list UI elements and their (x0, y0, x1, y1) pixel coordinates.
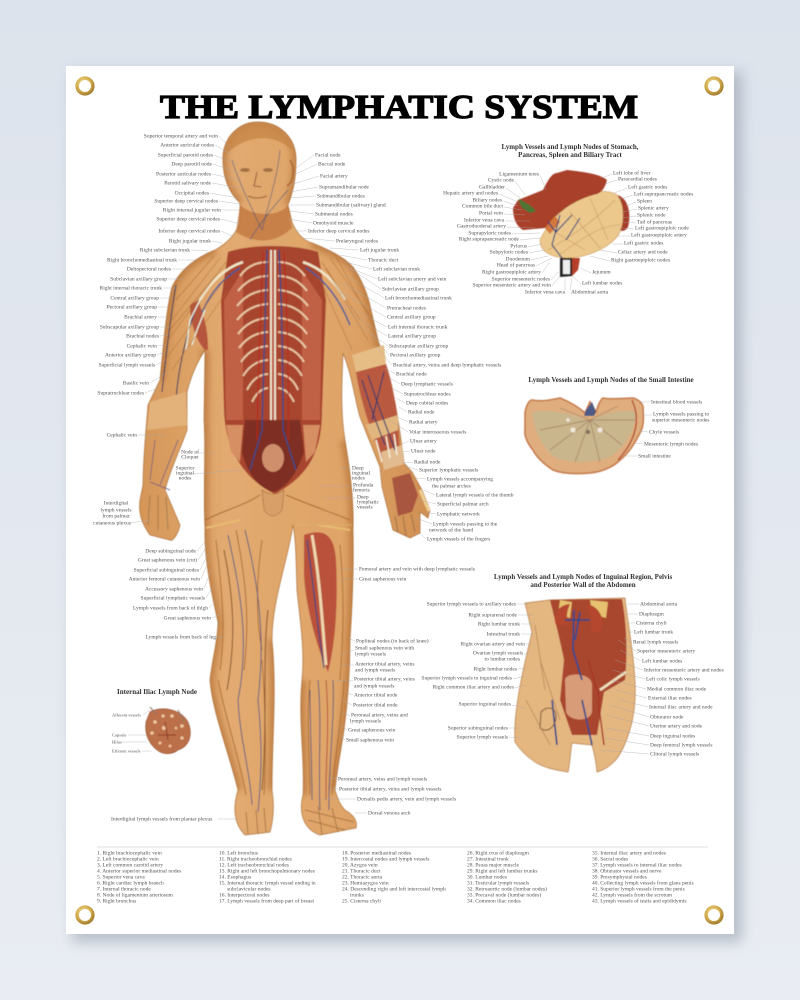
right labels: head to forearm: Brachial node (396, 372, 427, 378)
right labels: groin and lower limb (111, 466, 475, 823)
body silhouette (140, 122, 430, 835)
labels: stomach inset: Pylorus (510, 244, 527, 250)
left labels: forearm, hand and thigh: Superficial subinguinal nodes (134, 567, 199, 574)
right labels: head to forearm: Volar interosseous vessels (409, 430, 466, 436)
right labels: groin and lower limb: Small saphenous vein (346, 738, 394, 744)
illustration: lymph node (146, 707, 190, 754)
labels: stomach inset: Tail of pancreas (637, 219, 672, 226)
legend column 1: 2. Left brachiocephalic vein (97, 856, 159, 863)
right labels: head to forearm: Superior lymphatic vessels (419, 468, 478, 474)
legend column 1: 7. Internal thoracic node (97, 887, 151, 893)
labels: pelvis inset: Superior mesenteric artery (637, 649, 696, 655)
labels: pelvis inset: Right lumbar trunk (478, 622, 520, 628)
labels: stomach inset: Left gastroepiploic node (635, 225, 689, 232)
left labels: forearm, hand and thigh: Cloquet (181, 455, 199, 461)
legend column 5: 42. Lymph vessels from the scrotum (592, 892, 673, 899)
left labels: forearm, hand and thigh: Superficial lymphatic vessels (141, 595, 205, 602)
heading: lymph node inset: Internal Iliac Lymph Node (117, 688, 197, 696)
right labels: groin and lower limb: vessels (357, 505, 373, 511)
right labels: groin and lower limb: Great saphenous vein (348, 728, 396, 734)
left labels: head to arm: Cephalic vein (127, 344, 157, 350)
left labels: head to arm: Inferior deep cervical nodes (158, 228, 220, 235)
right labels: groin and lower limb: nodes (352, 476, 365, 482)
right labels: head to forearm: Supratrochlear nodes (404, 392, 451, 398)
labels: pelvis inset: Deep femoral lymph vessels (650, 742, 712, 749)
inset: small intestine (525, 376, 709, 474)
right labels: head to forearm: Left subclavian trunk (373, 266, 420, 273)
labels: pelvis inset (421, 602, 724, 758)
left labels: forearm, hand and thigh: Cephalic vein (107, 433, 137, 439)
right labels: head to forearm: Omohyoid muscle (313, 221, 354, 227)
legend column 2: subclavicular nodes (227, 887, 271, 893)
left labels: head to arm: Right internal jugular vein (163, 208, 221, 214)
left labels: head to arm: Occipital nodes (175, 191, 209, 197)
left labels: forearm, hand and thigh: Great saphenous vein (164, 616, 211, 622)
labels: stomach inset: Left suprapancreatic nodes (634, 191, 693, 198)
labels: small intestine inset: Chyle vessels (649, 430, 679, 436)
right labels: head to forearm: Prelaryngeal nodes (336, 239, 378, 245)
left labels: forearm, hand and thigh: Interdigital (104, 501, 129, 507)
labels: pelvis inset: Abdominal aorta (640, 602, 678, 608)
poster shadow (72, 72, 742, 942)
labels: pelvis inset: Superior lymph vessels to inguinal nodes (421, 676, 512, 682)
labels: stomach inset: Common bile duct (462, 204, 503, 210)
right labels: groin and lower limb: Deep (357, 495, 369, 501)
right labels: groin and lower limb: Peroneal artery, veins and (351, 713, 408, 719)
labels: pelvis inset: Right lumbar nodes (474, 667, 517, 673)
right labels: groin and lower limb: Dorsal venous arch (368, 811, 411, 817)
legend column 3: 25. Cisterna chyli (342, 899, 381, 905)
right labels: groin and lower limb: Posterior tibial node (353, 703, 398, 709)
left labels: head to arm: Basilic vein (123, 381, 149, 387)
labels: pelvis inset: Ovarian lymph vessels (473, 651, 523, 657)
labels: pelvis inset: Cisterna chyli (636, 621, 667, 627)
right labels: groin and lower limb: femoris (353, 487, 370, 494)
labels: stomach inset: Hepatic artery and nodes (443, 191, 498, 197)
legend column 4: 34. Common iliac nodes (467, 899, 521, 905)
legend column 4: 29. Right and left lumbar trunks (467, 868, 538, 875)
labels: stomach inset: Right suprapancreatic node (459, 237, 520, 243)
labels: stomach inset: Spleen (637, 199, 652, 205)
labels: stomach inset: Splenic node (637, 213, 666, 219)
labels: stomach inset: Inferior vena cava (464, 217, 505, 224)
numbered legend (97, 850, 694, 905)
right labels: groin and lower limb: lymph vessels (350, 719, 381, 725)
labels: small intestine inset: superior mesenteric nodes (652, 418, 709, 424)
left labels: head to arm: Posterior auricular nodes (156, 172, 211, 178)
labels: pelvis inset: Superior subinguinal nodes (448, 726, 508, 732)
left labels: forearm, hand and thigh: Deep subinguinal node (145, 549, 197, 555)
labels: stomach inset (443, 170, 693, 296)
labels: pelvis inset: Superior inguinal nodes (458, 702, 511, 708)
labels: pelvis inset: Renal lymph vessels (633, 640, 678, 646)
labels: pelvis inset: Left lumbar nodes (642, 658, 682, 665)
legend column 2: 11. Right tracheobronchial nodes (219, 857, 292, 863)
right labels: groin and lower limb: and lymph vessels (354, 684, 394, 690)
right labels: head to forearm: Left subclavian artery and vein (378, 276, 447, 283)
right labels: groin and lower limb: Posterior tibial artery, veins (354, 677, 415, 683)
right labels: groin and lower limb: Anterior tibial artery, veins (355, 662, 415, 668)
legend column 2: 16. Interpectoral nodes (219, 893, 270, 899)
left labels: forearm, hand and thigh: nodes (179, 476, 191, 482)
right labels: head to forearm: Left internal thoracic trunk (388, 324, 448, 331)
heading: pelvis inset: and Posterior Wall of the Abdomen (530, 581, 636, 589)
labels: pelvis inset: Right suprarenal node (468, 613, 518, 619)
leader lines: pelvis inset (509, 604, 649, 754)
left labels: forearm, hand and thigh: from palmar (102, 513, 130, 520)
labels: pelvis inset: Clitoral lymph vessels (650, 752, 699, 758)
right labels: head to forearm: Lateral axillary group (388, 334, 436, 340)
right labels: groin and lower limb: Peroneal artery, veins and lymph vessels (338, 777, 427, 783)
legend column 3: 21. Thoracic duct (342, 869, 381, 875)
labels: stomach inset: Inferior vena cava (525, 289, 566, 296)
left labels: forearm, hand and thigh: Lymph vessels from back of thigh (133, 605, 208, 612)
right labels: groin and lower limb: Profunda (353, 482, 374, 489)
labels: pelvis inset: Inferior mesenteric artery and nodes (644, 667, 724, 674)
legend column 3: 20. Azygos vein (342, 863, 378, 869)
left labels: forearm, hand and thigh (93, 433, 216, 641)
labels: stomach inset: Celiac artery and node (618, 250, 668, 256)
labels: pelvis inset: Obturator node (650, 715, 684, 721)
left labels: head to arm: Superior deep cervical nodes (156, 217, 220, 223)
leg dissection: viewer right thigh (296, 525, 352, 672)
left labels: forearm, hand and thigh: Anterior femoral cutaneous vein (129, 576, 200, 583)
labels: lymph node inset: Afferent vessels (112, 712, 141, 717)
left labels: head to arm: Superior deep cervical nodes (154, 199, 218, 205)
left labels: head to arm: Supratrochlear nodes (97, 391, 144, 397)
right labels: head to forearm: Subclavian axillary group (382, 287, 439, 293)
labels: stomach inset: Splenic artery (638, 206, 669, 212)
illustration: stomach and liver (513, 170, 629, 277)
left labels: head to arm: Superficial parotid nodes (158, 152, 213, 159)
labels: pelvis inset: Internal iliac artery and node (649, 705, 713, 711)
right labels: head to forearm: the palmar arches (432, 484, 471, 490)
labels: small intestine inset: Mesenteric lymph nodes (644, 442, 698, 448)
right labels: head to forearm (308, 153, 514, 543)
left labels: forearm, hand and thigh: inguinal (176, 471, 194, 477)
right labels: groin and lower limb: lymphatic (357, 500, 380, 506)
right labels: head to forearm: Deep cubital nodes (406, 401, 448, 407)
legend column 2: 12. Left tracheobronchial nodes (219, 862, 289, 869)
left labels: head to arm: Right bronchomediastinal trunk (107, 258, 177, 264)
legend column 4: 32. Retroaortic node (lumbar nodes) (467, 886, 547, 893)
legend column 2 (219, 850, 316, 905)
legend column 2: 10. Left bronchus (219, 850, 258, 857)
legend column 1: 3. Left common carotid artery (97, 862, 163, 869)
head shading and face (225, 124, 293, 241)
heading: stomach inset (501, 143, 639, 159)
legend column 1: 8. Node of ligamentum arteriosum (97, 892, 174, 899)
right labels: head to forearm: Superficial palmar arch (437, 501, 489, 508)
legend column 4: 33. Precaval node (lumbar nodes) (467, 892, 541, 899)
leader lines: stomach inset (499, 174, 637, 290)
left labels: head to arm (97, 134, 221, 397)
labels: small intestine inset: Lymph vessels passing to (653, 412, 709, 418)
inset: inguinal region, pelvis and posterior abdominal wall (421, 573, 724, 772)
legend column 4: 31. Testicular lymph vessels (467, 881, 529, 887)
legend column 3: 23. Hemiazygos vein (342, 881, 389, 887)
heading: stomach inset: Pancreas, Spleen and Biliary Tract (518, 151, 622, 159)
spine and vessels (196, 250, 350, 470)
labels: stomach inset: Gallbladder (479, 185, 505, 191)
right labels: groin and lower limb: Posterior tibial artery, veins and lymph vessels (339, 787, 441, 793)
labels: stomach inset: Left lobe of liver (613, 170, 651, 177)
left labels: forearm, hand and thigh: Great saphenous vein (cut) (138, 557, 197, 564)
legend column 4: 28. Psoas major muscle (467, 863, 519, 869)
labels: stomach inset: Ligamentum teres (499, 172, 539, 178)
left labels: head to arm: Right jugular trunk (169, 239, 211, 245)
labels: pelvis inset: Medial common iliac node (647, 687, 707, 693)
labels: stomach inset: Cystic node (488, 178, 515, 184)
left labels: head to arm: Brachial nodes (126, 334, 159, 340)
right labels: groin and lower limb: Deep (352, 466, 364, 472)
legend column 3: 18. Posterior mediastinal nodes (342, 851, 411, 857)
right labels: head to forearm: network of the hand (429, 527, 473, 534)
left labels: head to arm: Deep parotid node (171, 162, 213, 168)
legend column 5: 38. Obturator vessels and nerve (592, 869, 662, 875)
legend column 5: 43. Lymph vessels of testis and epididymis (592, 898, 687, 905)
labels: pelvis inset: Superior lymph vessels to axillary nodes (427, 602, 516, 608)
leg muscle strokes and vessels (216, 530, 354, 834)
legend column 5: 37. Lymph vessels to internal iliac nodes (592, 863, 682, 869)
right labels: head to forearm: Left bronchomediastinal trunk (385, 295, 452, 302)
right labels: head to forearm: Left jugular trunk (360, 247, 399, 254)
ribs (237, 262, 308, 402)
labels: pelvis inset: Right ovarian artery and vein (461, 642, 525, 648)
right labels: head to forearm: Lymph vessels passing to the (433, 522, 498, 528)
labels: pelvis inset: Right common iliac artery and nodes (433, 685, 514, 691)
left labels: forearm, hand and thigh: Accessory saphenous vein (145, 587, 203, 593)
labels: pelvis inset: Deep inguinal nodes (650, 734, 695, 740)
inset: stomach, pancreas, spleen and biliary tract (443, 143, 693, 296)
right labels: groin and lower limb: Interdigital lymph vessels from plantar plexus (111, 816, 212, 823)
legend column 1 (97, 851, 181, 905)
right labels: groin and lower limb: Popliteal nodes (in back of knee) (356, 638, 429, 645)
labels: pelvis inset: Left colic lymph vessels (646, 676, 700, 683)
legend column 5: 40. Collecting lymph vessels from glans penis (592, 880, 694, 887)
labels: small intestine inset: Intestinal blood vessels (651, 400, 702, 406)
right labels: head to forearm: Facial artery (320, 174, 348, 180)
right labels: head to forearm: Deep lymphatic vessels (401, 382, 453, 388)
legend column 5: 41. Superior lymph vessels from the penis (592, 886, 685, 893)
legend column 3: trunks (350, 893, 364, 899)
right labels: head to forearm: Lymph vessels of the fingers (427, 536, 490, 543)
labels: stomach inset: Abdominal aorta (571, 290, 609, 296)
legend column 2: 13. Right and left bronchopulmonary nodes (219, 868, 315, 875)
left labels: head to arm: Anterior axillary group (105, 353, 156, 359)
right labels: groin and lower limb: lymph vessels (355, 652, 386, 658)
left labels: head to arm: Subscapular axillary group (100, 325, 159, 331)
right labels: head to forearm: Central axillary group (387, 315, 436, 321)
labels: small intestine inset: Small intestine (638, 454, 671, 460)
right labels: head to forearm: Subscapular axillary group (389, 344, 449, 350)
right labels: head to forearm: Pretracheal nodes (387, 306, 426, 312)
left labels: head to arm: Pectoral axillary group (107, 305, 157, 311)
left labels: head to arm: Superficial lymph vessels (98, 362, 155, 369)
labels: stomach inset: Paracardial nodes (618, 177, 657, 183)
legend column 4: 27. Intestinal trunk (467, 857, 509, 863)
labels: stomach inset: Duodenum (506, 257, 531, 263)
legend column 4 (467, 850, 547, 905)
labels: stomach inset: Superior mesenteric artery and vein (472, 283, 551, 289)
heading: small intestine inset: Lymph Vessels and Lymph Nodes of the Small Intestine (528, 376, 694, 384)
right labels: head to forearm: Facial node (315, 153, 341, 159)
right labels: groin and lower limb: Small saphenous vein with (355, 646, 414, 652)
left labels: forearm, hand and thigh: cutaneous plexus (93, 521, 131, 527)
right labels: head to forearm: Lymph vessels accompanying (427, 477, 493, 483)
legend column 5: 36. Sacral nodes (592, 857, 628, 863)
heading: pelvis inset (494, 573, 672, 589)
leader lines: main figure (130, 136, 436, 819)
labels: stomach inset: Gastroduodenal artery (457, 224, 506, 230)
illustration: intestine fan (525, 398, 643, 474)
labels: stomach inset: Subpyloric nodes (490, 250, 528, 256)
arm dissection: viewer right (352, 345, 429, 536)
labels: stomach inset: Left lumbar nodes (582, 280, 622, 287)
labels: pelvis inset: External iliac nodes (648, 696, 692, 702)
labels: pelvis inset: Intestinal trunk (487, 632, 520, 638)
left labels: head to arm: Central axillary group (110, 296, 159, 302)
legend column 5: 35. Internal iliac artery and nodes (592, 851, 666, 857)
left labels: head to arm: Right subclavian trunk (140, 248, 190, 254)
legend column 4: 30. Lumbar nodes (467, 875, 507, 881)
poster sheet (66, 66, 734, 934)
left labels: forearm, hand and thigh: Node of (181, 449, 199, 456)
legend column 1: 5. Superior vena cava (97, 875, 145, 881)
right labels: groin and lower limb: Femoral artery and vein with deep lymphatic vessels (359, 567, 475, 573)
legend column 4: 26. Right crus of diaphragm (467, 850, 530, 857)
grommets (77, 78, 722, 923)
arm dissection: viewer left (147, 285, 208, 530)
left labels: head to arm: Superior temporal artery and vein (144, 134, 218, 140)
legend column 5: 39. Presymphysial nodes (592, 875, 647, 881)
labels: pelvis inset: Left lumbar trunk (634, 629, 673, 636)
legend column 1: 6. Right cardiac lymph branch (97, 881, 164, 887)
right labels: head to forearm: Submental nodes (315, 212, 353, 218)
right labels: head to forearm: Radial artery (409, 420, 438, 426)
legend column 3: 24. Descending right and left intercostal lymph (342, 886, 446, 893)
labels: stomach inset: Biliary nodes (473, 198, 502, 204)
legend column 5 (592, 851, 694, 905)
groin (205, 490, 350, 530)
right labels: groin and lower limb: Dorsalis pedis artery, vein and lymph vessels (357, 797, 456, 803)
legend column 3 (342, 851, 446, 905)
left labels: forearm, hand and thigh: Superior (176, 466, 195, 472)
right labels: head to forearm: Radial node (414, 460, 441, 466)
labels: stomach inset: Suprapyloric nodes (468, 231, 511, 237)
labels: pelvis inset: to lumbar nodes (485, 657, 520, 663)
right labels: head to forearm: Lateral lymph vessels of the thumb (436, 492, 514, 499)
labels: pelvis inset: Superior lymph vessels (457, 735, 508, 741)
right labels: head to forearm: Ulnar node (411, 449, 436, 455)
labels: lymph node inset: Capsule (112, 732, 127, 737)
right labels: head to forearm: Supramandibular node (319, 185, 370, 191)
right labels: groin and lower limb: Anterior tibial node (354, 693, 398, 699)
left labels: head to arm: Parotid salivary node (164, 181, 212, 187)
leader lines: small intestine inset (626, 402, 652, 456)
inset: internal iliac lymph node (112, 688, 197, 754)
left labels: forearm, hand and thigh: Lymph vessels from back of leg (146, 634, 216, 641)
heading: stomach inset: Lymph Vessels and Lymph Nodes of Stomach, (501, 143, 639, 151)
labels: lymph node inset: Efferent vessels (112, 748, 141, 753)
right labels: groin and lower limb: inguinal (352, 471, 370, 477)
left labels: head to arm: Deltopectoral nodes (127, 267, 171, 273)
legend column 3: 19. Intercostal nodes and lymph vessels (342, 857, 429, 863)
legend column 2: 14. Esophagus (219, 875, 251, 881)
right labels: head to forearm: Brachial artery, veins and deep lymphatic vessels (393, 363, 501, 369)
legend column 1: 4. Anterior superior mediastinal nodes (97, 869, 181, 875)
torso cavity (221, 246, 326, 494)
leader lines: lymph node inset (122, 710, 152, 751)
labels: stomach inset: Head of pancreas (497, 262, 535, 269)
labels: lymph node inset: Hilus (112, 739, 122, 744)
right labels: head to forearm: Ulnar artery (410, 439, 437, 445)
labels: stomach inset: Portal vein (479, 211, 503, 217)
legend column 2: 15. Internal thoracic lymph vessel ending in (219, 881, 316, 887)
labels: stomach inset: Right gastroepiploic artery (482, 270, 541, 276)
labels: pelvis inset: Diaphragm (639, 612, 664, 618)
right labels: head to forearm: Lymphatic network (437, 512, 480, 518)
left labels: head to arm: Right internal thoracic trunk (100, 286, 162, 292)
legend column 3: 22. Thoracic aorta (342, 875, 383, 881)
illustration: pelvis (515, 598, 635, 772)
labels: stomach inset: Left gastroepiploic artery (631, 232, 687, 239)
labels: stomach inset: Right gastroepiploic nodes (611, 258, 670, 264)
right labels: head to forearm: Inferior deep cervical nodes (308, 228, 370, 235)
right labels: head to forearm: Pectoral axillary group (390, 353, 441, 359)
labels: pelvis inset: Uterine artery and node (650, 724, 703, 730)
labels: lymph node inset (112, 712, 141, 753)
legend column 1: 1. Right brachiocephalic vein (97, 851, 162, 857)
right labels: head to forearm: Submandibular nodes (317, 194, 365, 200)
right labels: head to forearm: Buccal node (318, 162, 346, 168)
right labels: head to forearm: Thoracic duct (368, 258, 399, 264)
heading: pelvis inset: Lymph Vessels and Lymph Nodes of Inguinal Region, Pelvis (494, 573, 672, 581)
left labels: head to arm: Subclavian axillary group (110, 277, 167, 283)
body edge shading (160, 122, 395, 795)
right labels: head to forearm: Radial node (408, 410, 435, 416)
title: THE LYMPHATIC SYSTEM (160, 89, 638, 126)
labels: stomach inset: Jejunum (592, 270, 611, 276)
main figure: full body lymphatic anatomy (140, 122, 430, 835)
labels: stomach inset: Left gastric nodes (624, 240, 663, 247)
labels: stomach inset: Left gastric nodes (628, 184, 667, 191)
left labels: forearm, hand and thigh: lymph vessels (100, 508, 132, 514)
divider above numbered legend (97, 846, 708, 848)
right labels: head to forearm: Submandibular (salivary) gland (316, 202, 386, 209)
right labels: groin and lower limb: and lymph vessels (355, 668, 395, 674)
chest and shoulder muscle strokes (165, 255, 376, 370)
left labels: head to arm: Anterior auricular nodes (160, 143, 214, 149)
right labels: groin and lower limb: Great saphenous vein (359, 577, 407, 583)
labels: small intestine inset (638, 400, 709, 460)
legend column 2: 17. Lymph vessels from deep part of breast (219, 898, 314, 905)
left labels: head to arm: Brachial artery (124, 315, 157, 321)
legend column 1: 9. Right bronchus (97, 899, 136, 905)
labels: stomach inset: Superior mesenteric nodes (492, 277, 550, 283)
